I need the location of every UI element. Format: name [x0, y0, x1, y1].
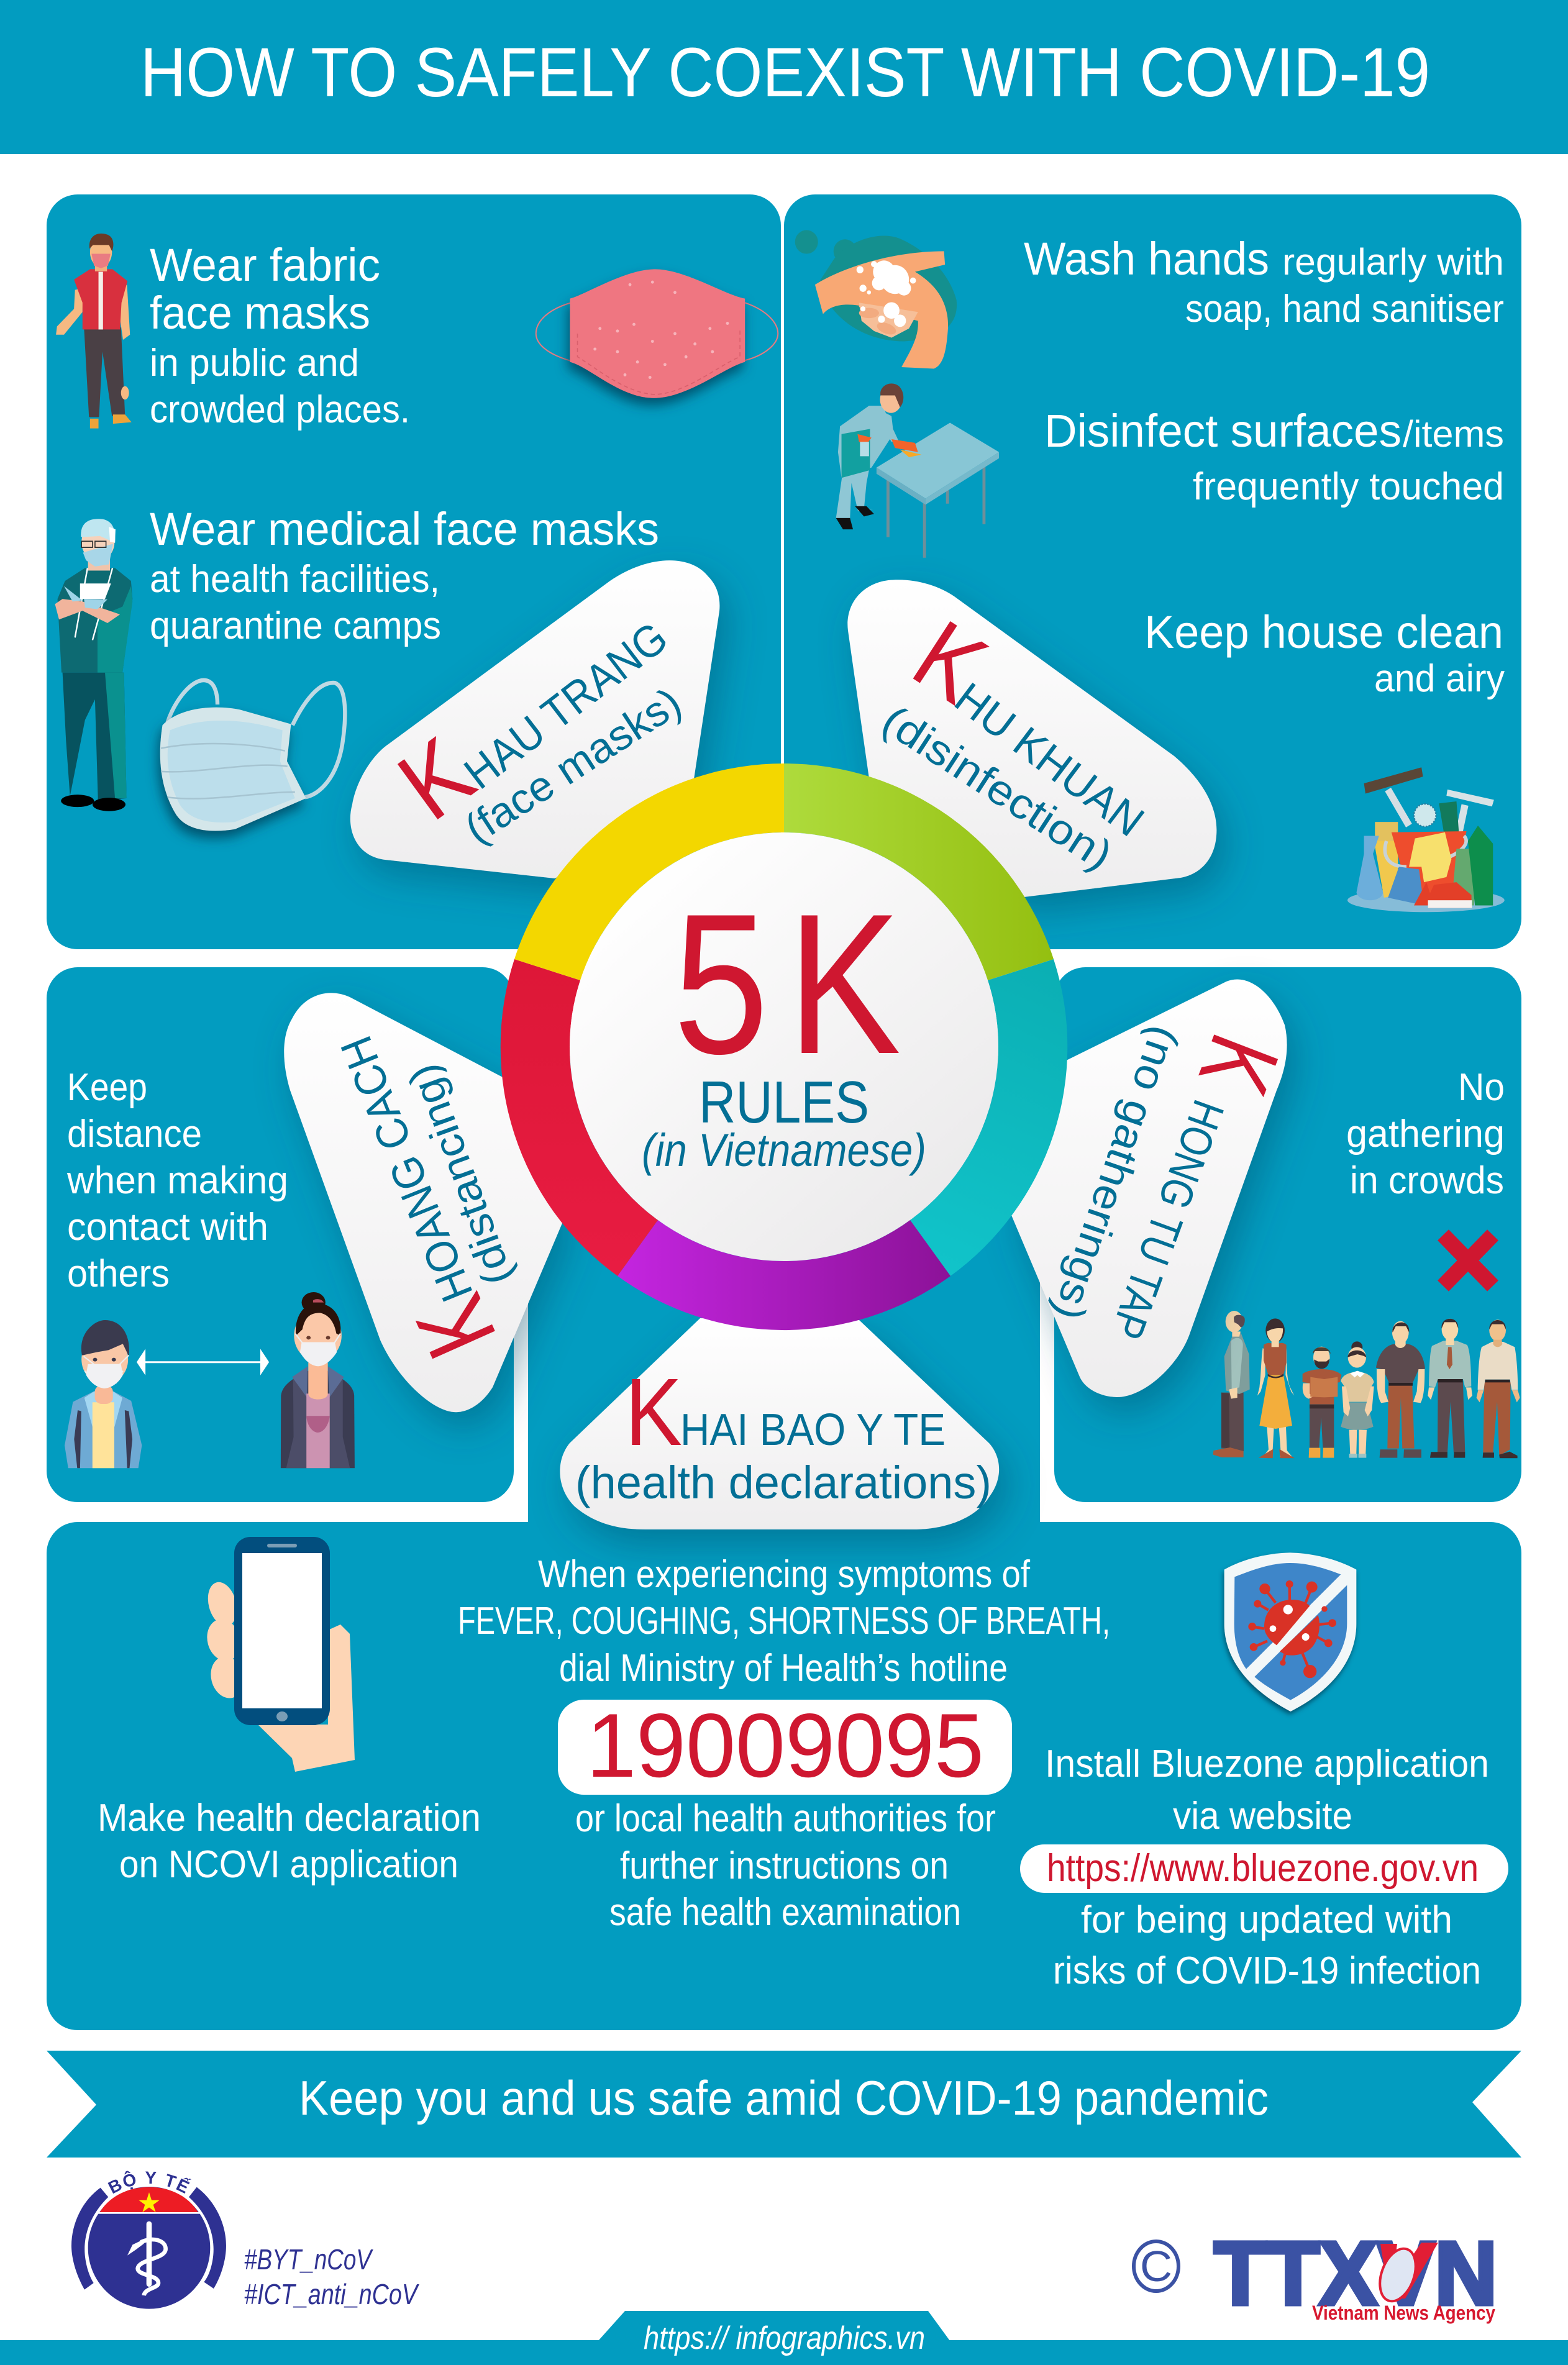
text block: keep house clean — [1144, 606, 1505, 700]
text block: medical face masks: quarantine camps — [150, 604, 441, 647]
icon: crowd of people — [1213, 1311, 1520, 1458]
text block: keep distance: when making — [66, 1159, 288, 1202]
URL pill — [1020, 1844, 1508, 1893]
heading: 5K RULES — [642, 873, 926, 1176]
logo: TTXVN: Vietnam News Agency — [1312, 2302, 1495, 2324]
petal: KHOANG CACH (distancing): K — [394, 1280, 517, 1374]
icon: two people keeping distance — [65, 1292, 355, 1468]
text block: keep house clean: Keep house clean — [1144, 606, 1503, 658]
footer bar — [0, 2311, 1568, 2365]
person: woman in orange skirt — [1257, 1318, 1295, 1458]
text block: wash hands: regularly with — [1282, 241, 1504, 283]
panel: centre connector background — [528, 1056, 1040, 1528]
text block: local authorities: or local health authorities for — [575, 1797, 996, 1840]
text block: disinfect surfaces: frequently touched — [1193, 465, 1504, 508]
text block: fabric face masks: Wear fabric — [150, 239, 380, 291]
text block: Bluezone: for being updated with — [1081, 1898, 1452, 1941]
icon: washing hands — [795, 230, 957, 368]
person: woman in blouse — [1341, 1341, 1374, 1458]
petal: KHU KHUAN (disinfection): K — [895, 599, 1005, 724]
panel: top right background — [784, 194, 1521, 949]
icon: man in fabric mask — [56, 234, 132, 429]
petal: KHU KHUAN (disinfection): (disinfection) — [874, 696, 1121, 880]
text block: no gathering — [1346, 1066, 1505, 1202]
logo text: BO Y TE: BỘ Y TẾ — [108, 2171, 191, 2194]
petal: KHAI BAO Y TE (health declarations): K — [625, 1359, 682, 1465]
text block: Bluezone — [1020, 1743, 1508, 1992]
petal: KHAI BAO Y TE (health declarations): (health declarations) — [575, 1457, 991, 1508]
petal: KHOANG CACH (distancing) — [284, 993, 562, 1412]
banner — [47, 2051, 1521, 2158]
text block: local authorities: safe health examination — [609, 1891, 961, 1934]
icon: Bluezone shield — [1224, 1552, 1356, 1711]
icon: hand holding phone — [203, 1537, 355, 1772]
hashtags — [244, 2243, 420, 2310]
person: man in cream shirt — [1477, 1319, 1520, 1458]
text block: no gathering: gathering — [1346, 1113, 1505, 1155]
text block: symptoms — [458, 1553, 1110, 1690]
text block: disinfect surfaces: /items — [1403, 413, 1504, 455]
logo: TTXVN: TTXVN — [1214, 2223, 1497, 2323]
text block: keep distance: Keep — [67, 1066, 147, 1109]
arrow: distance — [137, 1349, 269, 1375]
copyright symbol: C — [1140, 2242, 1172, 2290]
text block: disinfect surfaces — [1044, 405, 1504, 508]
text block: Bluezone: risks of COVID-19 infection — [1053, 1949, 1481, 1992]
chart: 5K colour ring — [501, 763, 1067, 1330]
text block: Bluezone: https://www.bluezone.gov.vn — [1047, 1847, 1479, 1890]
text block: Bluezone: via website — [1173, 1795, 1352, 1838]
text block: health declaration — [98, 1797, 481, 1886]
panel: middle left background — [47, 967, 514, 1502]
text block: keep distance: distance — [67, 1113, 202, 1155]
icon: medical mask — [160, 680, 345, 831]
text block: wash hands: Wash hands — [1024, 233, 1269, 285]
panel: top left background — [47, 194, 781, 949]
text block: medical face masks — [150, 503, 659, 647]
heading: 5K RULES: (in Vietnamese) — [642, 1124, 926, 1176]
petal: KHONG TU TAP (no gatherings): HONG TU TAP — [1101, 1094, 1233, 1346]
panel: bottom background — [47, 1522, 1521, 2030]
petal: KHONG TU TAP (no gatherings): K — [1178, 1021, 1300, 1109]
icon: red cross — [1443, 1235, 1493, 1286]
petal: KHAU TRANG (face masks): K — [379, 716, 493, 841]
text block: health declaration: on NCOVI application — [119, 1843, 458, 1886]
hotline number: 19009095 — [586, 1695, 984, 1796]
person: man with tie — [1428, 1319, 1472, 1458]
petal: KHOANG CACH (distancing): HOANG CACH — [331, 1029, 483, 1308]
title: HOW TO SAFELY COEXIST WITH COVID-19 — [140, 34, 1430, 111]
heading: 5K RULES: 5 — [673, 873, 768, 1096]
copyright symbol — [1134, 2241, 1178, 2291]
heading: 5K RULES: RULES — [699, 1069, 869, 1136]
text block: local authorities: further instructions on — [620, 1844, 949, 1887]
text block: keep house clean: and airy — [1374, 657, 1505, 700]
text block: disinfect surfaces: Disinfect surfaces — [1044, 405, 1402, 457]
petal: KHONG TU TAP (no gatherings) — [1011, 979, 1300, 1397]
icon: doctor — [55, 519, 132, 811]
logo: Ministry of Health — [71, 2187, 226, 2309]
petal: KHOANG CACH (distancing): (distancing) — [398, 1058, 522, 1292]
heading: 5K RULES: K — [788, 873, 901, 1096]
text block: local authorities — [575, 1797, 996, 1934]
text block: health declaration: Make health declaration — [98, 1797, 481, 1839]
text block: symptoms: dial Ministry of Health’s hotline — [559, 1647, 1008, 1690]
icon: fabric mask — [536, 269, 778, 398]
icon: person disinfecting a table — [836, 383, 999, 558]
hashtags: #ICT_anti_nCoV — [244, 2278, 420, 2310]
panel: middle right background — [1054, 967, 1521, 1502]
petal: KHAI BAO Y TE (health declarations): HAI BAO Y TE — [680, 1405, 946, 1455]
icon: cleaning kit — [1347, 767, 1505, 912]
petal: KHAU TRANG (face masks): HAU TRANG — [455, 613, 677, 799]
banner: Keep you and us safe amid COVID-19 pandemic — [299, 2071, 1269, 2125]
petal: KHU KHUAN (disinfection): HU KHUAN — [946, 673, 1153, 845]
icon: man with mask — [65, 1320, 142, 1468]
text block: Bluezone: Install Bluezone application — [1045, 1743, 1489, 1785]
text block: wash hands: soap, hand sanitiser — [1185, 288, 1504, 330]
text block: wash hands — [1024, 233, 1504, 330]
text block: fabric face masks: crowded places. — [150, 388, 410, 431]
petal: KHU KHUAN (disinfection) — [847, 580, 1216, 898]
icon: woman with mask — [281, 1292, 355, 1468]
text block: keep distance: others — [67, 1252, 170, 1295]
petal: KHAI BAO Y TE (health declarations) — [560, 1318, 999, 1529]
text block: no gathering: No — [1458, 1066, 1505, 1109]
text block: keep distance — [66, 1066, 288, 1295]
text block: symptoms: FEVER, COUGHING, SHORTNESS OF BREATH, — [458, 1600, 1110, 1643]
petal: KHONG TU TAP (no gatherings): (no gatherings) — [1044, 1020, 1189, 1326]
text block: fabric face masks — [150, 239, 410, 431]
petal: KHAU TRANG (face masks) — [350, 560, 719, 878]
person: man in dark shirt — [1376, 1321, 1425, 1458]
footer url: https:// infographics.vn — [644, 2320, 925, 2356]
header band — [0, 0, 1568, 154]
text block: medical face masks: Wear medical face masks — [150, 503, 659, 555]
centre circle — [570, 832, 998, 1261]
person: man with book — [1303, 1347, 1341, 1458]
text block: medical face masks: at health facilities, — [150, 558, 440, 601]
text block: fabric face masks: in public and — [150, 342, 359, 385]
petal: KHAU TRANG (face masks): (face masks) — [457, 678, 690, 853]
text block: symptoms: When experiencing symptoms of — [538, 1553, 1031, 1596]
text block: fabric face masks: face masks — [150, 287, 370, 339]
text block: no gathering: in crowds — [1350, 1159, 1504, 1202]
hashtags: #BYT_nCoV — [244, 2243, 373, 2276]
text block: keep distance: contact with — [67, 1206, 268, 1249]
person: old man — [1213, 1311, 1250, 1457]
